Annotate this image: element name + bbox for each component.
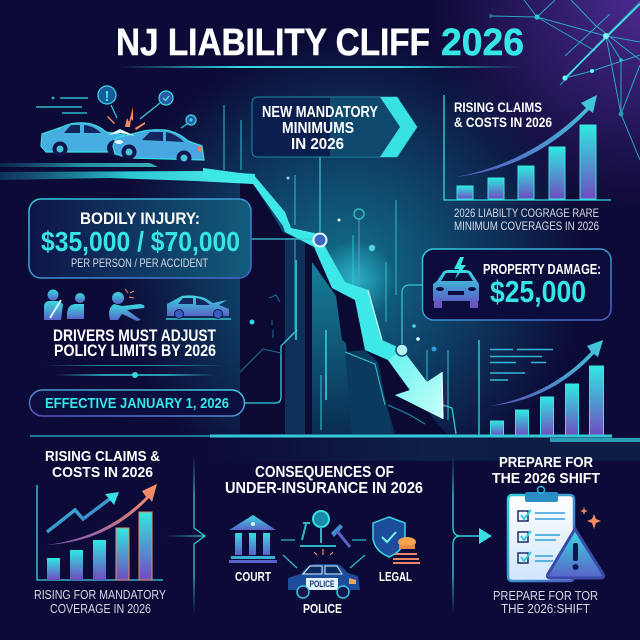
pill: effective date — [30, 390, 244, 416]
callout: new mandatory minimums: IN 2026 — [291, 136, 344, 153]
icons: injured people and damaged car — [44, 289, 231, 321]
panel: prepare for the 2026 shift: THE 2026:SHIFT — [501, 601, 590, 616]
icon: legal shield and coins — [373, 517, 420, 563]
icon: court — [229, 515, 277, 563]
cliff crack lines — [240, 240, 295, 372]
panel: property damage — [402, 249, 611, 344]
panel: prepare for the 2026 shift — [492, 454, 604, 616]
panel: property damage: $25,000 — [490, 274, 586, 309]
callout: new mandatory minimums: MINIMUMS — [282, 120, 354, 137]
title: 2026 — [441, 22, 524, 64]
arrow: right divider — [453, 455, 492, 615]
text: drivers must adjust: DRIVERS MUST ADJUST — [53, 326, 216, 345]
title: NJ LIABILITY CLIFF — [116, 22, 430, 64]
cliff rock — [240, 183, 456, 434]
panel: prepare for the 2026 shift: PREPARE FOR — [499, 454, 593, 471]
panel: bodily injury: $35,000 / $70,000 — [41, 226, 240, 257]
cliff nodes — [286, 176, 436, 356]
panel: consequences of under-insurance: CONSEQUENCES OF — [255, 464, 394, 481]
network graphic top right — [489, 0, 640, 160]
alert bubbles — [98, 86, 196, 128]
chart: lower right rising bars — [479, 340, 604, 436]
panel: consequences of under-insurance: UNDER-INSURANCE IN 2026 — [225, 480, 423, 497]
alert bubbles: ! — [104, 88, 110, 105]
panel: rising claims bottom left: COSTS IN 2026 — [52, 464, 153, 481]
icon: police car: POLICE — [310, 579, 334, 589]
motion lines — [36, 97, 88, 113]
text: drivers must adjust: POLICY LIMITS BY 2026 — [54, 341, 216, 360]
icon: magnifier and gavel — [300, 511, 350, 547]
cliff edge falling arrow — [0, 163, 443, 419]
right car — [108, 129, 204, 166]
callout: new mandatory minimums — [252, 97, 417, 157]
pill: effective date: EFFECTIVE JANUARY 1, 2026 — [45, 395, 229, 412]
panel: rising claims bottom left: RISING FOR MANDATORY — [34, 587, 166, 602]
arrow: left divider — [165, 455, 205, 615]
impact spark — [107, 107, 145, 130]
icon: sparkles — [580, 507, 601, 529]
illustration: car crash — [36, 86, 204, 166]
panel: rising claims bottom left: COVERAGE IN 2026 — [50, 601, 151, 616]
chart: rising claims top right: RISING CLAIMS — [454, 99, 542, 115]
chart: rising claims top right: 2026 LIABILTY COGRAGE RARE — [454, 206, 599, 220]
panel: bodily injury — [29, 199, 251, 278]
icon: damaged car — [166, 295, 231, 319]
connector: new minimums to cliff — [251, 157, 320, 239]
chart: rising claims top right: & COSTS IN 2026 — [454, 114, 552, 130]
panel: consequences of under-insurance: POLICE — [303, 601, 342, 616]
text: drivers must adjust — [53, 326, 216, 360]
chart: rising claims top right: MINIMUM COVERAGES IN 2026 — [454, 219, 599, 233]
icon: damaged car front — [433, 257, 479, 308]
panel: bodily injury: PER PERSON / PER ACCIDENT — [71, 256, 209, 270]
left car — [41, 123, 125, 156]
panel: consequences of under-insurance: LEGAL — [379, 569, 412, 584]
icon: clipboard checklist — [508, 486, 574, 581]
panel: rising claims bottom left: RISING CLAIMS & — [45, 448, 160, 465]
icon: sitting person in pain — [109, 289, 144, 321]
divider: horizontal bottom rule — [30, 434, 640, 442]
divider with dot — [45, 365, 225, 378]
icon: police car — [288, 549, 360, 598]
icon: warning triangle — [547, 529, 604, 578]
panel: bodily injury: BODILY INJURY: — [80, 209, 200, 228]
chart: rising claims top right — [444, 95, 611, 233]
callout: new mandatory minimums: NEW MANDATORY — [262, 104, 378, 121]
decorative light streaks — [223, 105, 449, 420]
panel: rising claims bottom left — [34, 448, 166, 616]
panel: prepare for the 2026 shift: PREPARE FOR TOR — [493, 588, 598, 603]
panel: property damage: PROPERTY DAMAGE: — [483, 261, 601, 278]
icon: neck injury person — [44, 290, 85, 320]
panel: prepare for the 2026 shift: THE 2026 SHIFT — [492, 470, 600, 487]
connector: effective date to cliff — [244, 330, 297, 403]
chart: bars and arrows — [37, 484, 163, 580]
panel: consequences of under-insurance — [225, 464, 423, 616]
panel: consequences of under-insurance: COURT — [235, 569, 271, 584]
icon: connector dashes — [281, 540, 366, 568]
